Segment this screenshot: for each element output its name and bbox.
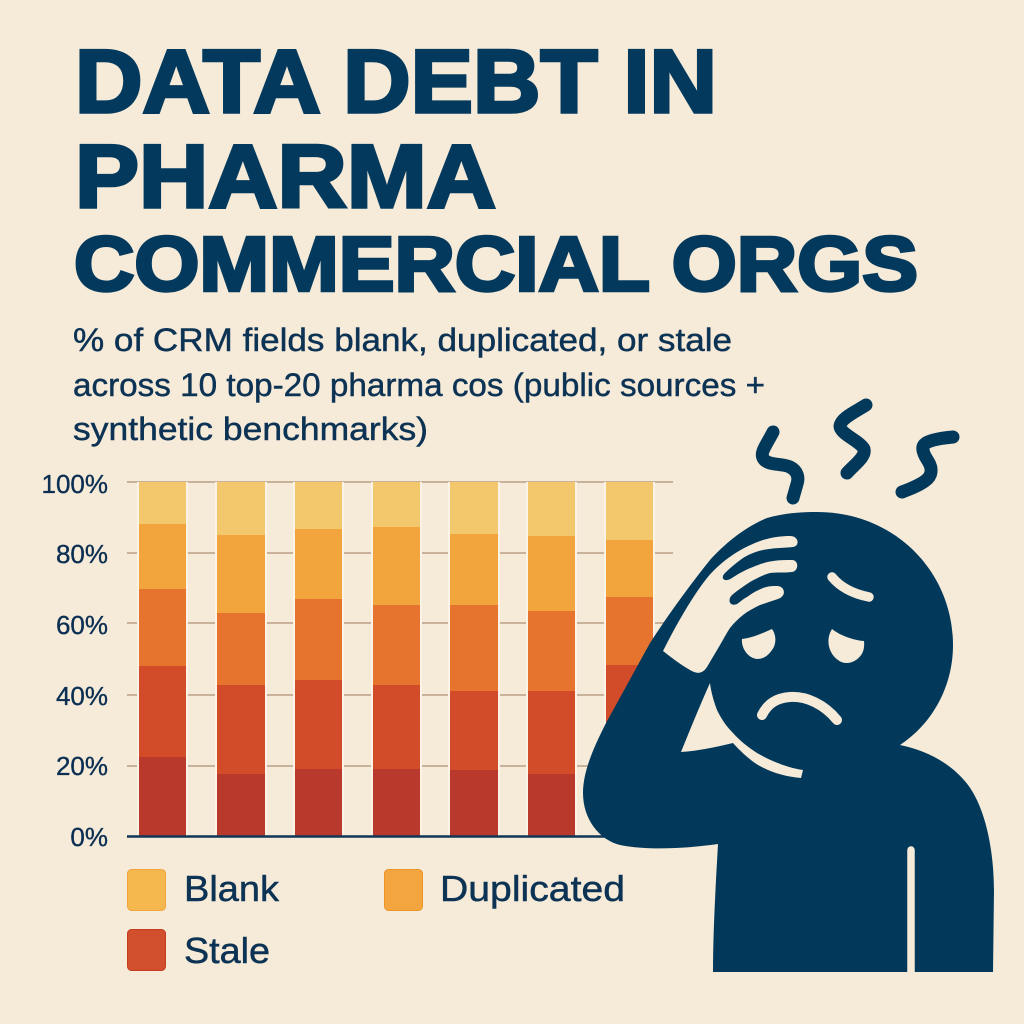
title: PHARMA <box>75 126 496 226</box>
legend: blank <box>128 868 280 910</box>
bar 1 <box>137 482 188 836</box>
hand on forehead <box>663 536 798 673</box>
eyebrow <box>832 577 869 597</box>
y axis labels: 20% <box>56 751 108 781</box>
legend: stale <box>128 930 270 971</box>
subtitle <box>73 322 765 447</box>
subtitle: % of CRM fields blank, duplicated, or stale <box>73 322 732 358</box>
legend: duplicated: Duplicated <box>440 868 625 909</box>
subtitle: across 10 top-20 pharma cos (public sources + <box>73 367 765 403</box>
bar 7 <box>604 482 655 836</box>
frown mouth <box>762 697 837 720</box>
y axis labels: 100% <box>42 469 108 499</box>
bar 3 <box>293 482 344 836</box>
title: COMMERCIAL ORGS <box>74 222 918 308</box>
bar 6 <box>526 482 577 836</box>
legend <box>128 868 625 971</box>
stacked bar chart <box>42 469 673 852</box>
y axis labels: 0% <box>70 822 108 852</box>
icon: stressed person <box>583 405 994 976</box>
y axis labels: 60% <box>56 610 108 640</box>
y axis labels: 40% <box>56 681 108 711</box>
y axis labels <box>42 469 108 852</box>
arm line <box>907 850 915 976</box>
bar 2 <box>215 482 267 836</box>
bar 4 <box>371 482 422 836</box>
stress squiggles <box>762 405 953 498</box>
legend: duplicated <box>384 868 625 910</box>
title <box>74 31 918 308</box>
y axis labels: 80% <box>56 539 108 569</box>
figure silhouette <box>583 512 994 972</box>
eye: right <box>828 629 864 663</box>
legend: blank: Blank <box>184 868 280 909</box>
legend: stale: Stale <box>184 930 270 971</box>
eye: left <box>742 629 775 659</box>
neck gap <box>681 683 803 778</box>
title: DATA DEBT IN <box>75 31 717 131</box>
bar 5 <box>448 482 500 836</box>
subtitle: synthetic benchmarks) <box>73 411 428 447</box>
